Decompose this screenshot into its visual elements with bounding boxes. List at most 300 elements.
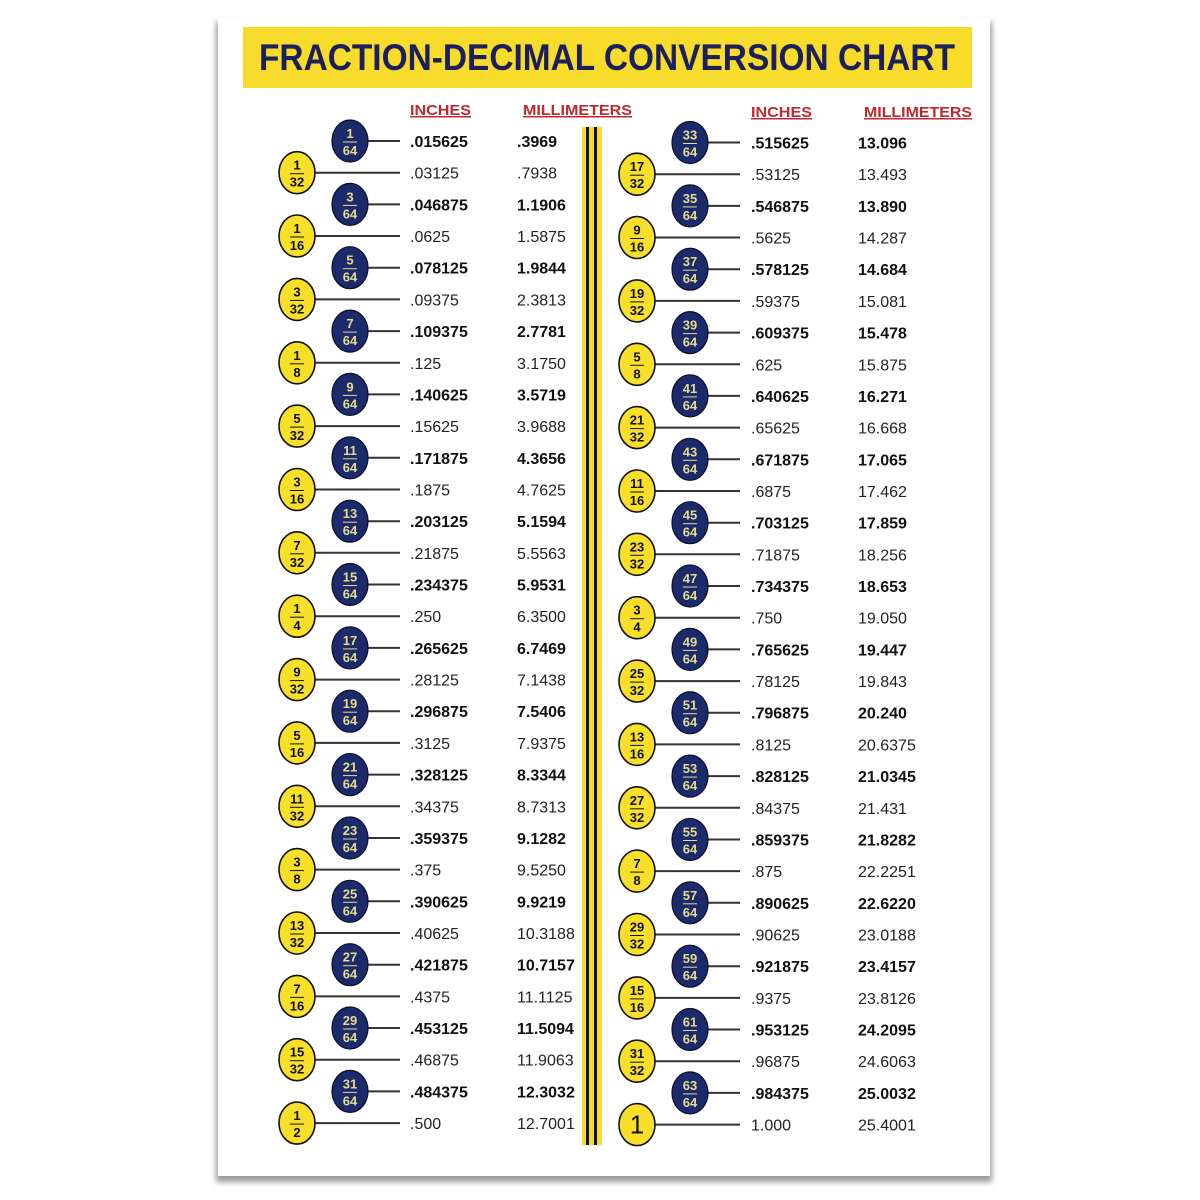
row 23/64: 23 [343, 823, 357, 838]
row 13/64: 5.1594 [517, 514, 566, 531]
row 3/64: .046875 [410, 197, 468, 214]
row 45/64 [672, 502, 907, 544]
row 1/64: .015625 [410, 134, 468, 151]
row 7/64 [332, 310, 566, 352]
row 9/64: 9 [346, 379, 354, 394]
row 43/64: 17.065 [858, 452, 907, 469]
row 53/64: 21.0345 [858, 769, 916, 786]
row 15/16: 23.8126 [858, 991, 916, 1008]
row 1/32 [279, 152, 557, 194]
row 25/64: .390625 [410, 894, 468, 911]
row 1/64: 1 [346, 126, 354, 141]
row 23/32 [619, 533, 907, 575]
row 3/16: 3 [293, 474, 301, 490]
row 19/64: 64 [343, 713, 358, 728]
column headers [410, 102, 972, 121]
row 57/64 [672, 882, 916, 924]
row 1/16 [279, 215, 566, 257]
row 1/16: 1 [293, 221, 301, 236]
title bar: FRACTION-DECIMAL CONVERSION CHART [259, 37, 955, 78]
row 1/32: 32 [290, 175, 304, 190]
row 3/32: 3 [293, 284, 301, 299]
row 29/64: 29 [343, 1013, 357, 1028]
row 3/64: 3 [346, 189, 354, 204]
row 5/8: 8 [633, 366, 641, 381]
row 57/64: 64 [683, 905, 698, 920]
row 1/32: .7938 [517, 166, 557, 183]
row 21/64: 21 [343, 760, 357, 775]
row 17/32: 17 [630, 159, 644, 174]
row 23/32: 18.256 [858, 547, 907, 564]
row 47/64: 47 [683, 571, 697, 586]
row 53/64: 64 [683, 778, 698, 793]
row 11/16: 16 [630, 493, 644, 508]
row 29/32: 29 [630, 920, 644, 934]
row 17/64: 64 [343, 650, 358, 665]
row 21/64: 8.3344 [517, 768, 566, 785]
row 35/64 [672, 185, 907, 227]
row 45/64: .703125 [751, 516, 809, 533]
row 13/16: .8125 [751, 737, 791, 754]
row 7/64: 7 [346, 316, 354, 331]
row 3/8: 8 [293, 872, 301, 887]
row 11/64: 11 [343, 443, 357, 458]
row 31/32: 32 [630, 1063, 644, 1078]
row 51/64: .796875 [751, 706, 809, 723]
row 11/64 [332, 437, 566, 479]
row 55/64: 64 [683, 842, 698, 856]
row 59/64 [672, 945, 916, 987]
row 61/64: 24.2095 [858, 1022, 916, 1040]
row 9/64: 3.5719 [517, 387, 566, 404]
row 23/64 [332, 817, 566, 859]
row 5/32: 3.9688 [517, 419, 566, 436]
row 17/64 [332, 627, 566, 669]
row 5/8: .625 [751, 357, 782, 374]
row 43/64 [672, 438, 907, 480]
row 37/64: 64 [683, 271, 698, 286]
row 55/64: .859375 [751, 832, 809, 850]
center divider [582, 127, 602, 1145]
row 49/64: .765625 [751, 642, 809, 659]
row 3/32: 2.3813 [517, 292, 566, 309]
row 17/32: .53125 [751, 167, 800, 184]
row 33/64 [672, 122, 907, 164]
row 13/32 [279, 912, 575, 954]
row 49/64: 64 [683, 651, 698, 666]
row 19/32: 15.081 [858, 294, 907, 311]
row 1/4: .250 [410, 609, 441, 626]
row 29/64: .453125 [410, 1021, 468, 1038]
row 11/32 [279, 785, 566, 827]
row 7/16: 16 [290, 998, 304, 1013]
row 47/64 [672, 565, 907, 607]
row 29/64: 11.5094 [517, 1021, 574, 1038]
row 53/64 [672, 755, 916, 797]
row 43/64: .671875 [751, 452, 809, 469]
row 21/64 [332, 754, 566, 796]
row 25/64: 64 [343, 903, 358, 918]
row 27/64 [332, 944, 575, 986]
row 21/32: .65625 [751, 421, 800, 438]
row 51/64: 64 [683, 715, 698, 730]
row 39/64: 39 [683, 318, 697, 333]
row 11/32: .34375 [410, 799, 459, 816]
row 19/64: 19 [343, 696, 357, 711]
row 43/64: 43 [683, 444, 697, 459]
row 49/64: 19.447 [858, 642, 907, 659]
row 27/64: 10.7157 [517, 958, 575, 975]
row 9/32: 32 [290, 682, 304, 697]
row 21/64: 64 [343, 777, 358, 792]
row 7/8: .875 [751, 864, 782, 881]
row 5/32 [279, 405, 566, 447]
row 1/16: 1.5875 [517, 229, 566, 246]
row 27/32: 27 [630, 793, 644, 808]
row 43/64: 64 [683, 461, 698, 476]
row 21/32: 21 [630, 413, 644, 428]
row 31/64 [332, 1070, 575, 1112]
row 41/64: .640625 [751, 389, 809, 406]
row 25/32: 32 [630, 683, 644, 698]
row 7/8: 22.2251 [858, 864, 916, 881]
row 19/32: 19 [630, 286, 644, 301]
row 3/4: 19.050 [858, 611, 907, 628]
row 1/2 [279, 1102, 575, 1144]
row 13/32: 32 [290, 935, 304, 950]
row 11/32: 32 [290, 808, 304, 823]
row 5/64: 5 [346, 253, 354, 268]
row 7/32: 7 [293, 538, 301, 553]
column headers: INCHES [751, 104, 812, 121]
row 3/4 [619, 597, 907, 639]
row 5/32: .15625 [410, 419, 459, 436]
row 7/16: .4375 [410, 989, 450, 1006]
row 47/64: 64 [683, 588, 698, 603]
row 59/64: 23.4157 [858, 959, 916, 976]
row 1/4: 6.3500 [517, 609, 566, 626]
row 19/32: .59375 [751, 294, 800, 311]
row 41/64: 16.271 [858, 389, 907, 406]
row 1: 1 [630, 1110, 644, 1140]
row 13/64: .203125 [410, 514, 468, 531]
row 5/8: 5 [633, 349, 641, 364]
row 1/64: .3969 [517, 134, 557, 151]
row 27/32: 32 [630, 810, 644, 825]
row 39/64: 15.478 [858, 326, 907, 343]
row 3/16: 4.7625 [517, 482, 566, 500]
row 15/32: 11.9063 [517, 1053, 574, 1070]
row 3/8: .375 [410, 863, 441, 880]
row 13/32: 10.3188 [517, 926, 575, 943]
row 5/8 [619, 343, 907, 385]
row 31/32: .96875 [751, 1054, 800, 1071]
row 5/64: 1.9844 [517, 261, 566, 278]
row 1: 25.4001 [858, 1118, 916, 1135]
row 15/32: 32 [290, 1062, 304, 1077]
row 25/32: .78125 [751, 674, 800, 691]
row 21/32 [619, 407, 907, 449]
row 1/2: 1 [293, 1108, 301, 1123]
row 1: 1.000 [751, 1118, 791, 1135]
row 7/64: 64 [343, 333, 358, 348]
row 7/16 [279, 975, 573, 1017]
row 55/64: 55 [683, 824, 697, 840]
row 41/64: 64 [683, 398, 698, 413]
row 11/32: 8.7313 [517, 799, 566, 816]
row 25/64: 25 [343, 886, 357, 901]
row 3/8: 9.5250 [517, 863, 566, 880]
row 31/32: 31 [630, 1046, 644, 1061]
row 9/16 [619, 216, 907, 258]
row 45/64: 64 [683, 525, 698, 540]
row 9/16: 14.287 [858, 230, 907, 248]
row 9/16: 9 [633, 222, 641, 238]
row 7/64: .109375 [410, 324, 468, 341]
row 1/8: 8 [293, 365, 301, 380]
row 3/32: 32 [290, 301, 304, 316]
row 59/64: .921875 [751, 959, 809, 976]
row 63/64: 63 [683, 1078, 697, 1093]
row 37/64 [672, 248, 907, 290]
row 35/64: 35 [683, 191, 697, 206]
row 59/64: 64 [683, 968, 698, 983]
row 9/32: 7.1438 [517, 673, 566, 690]
row 3/64 [332, 183, 566, 225]
row 11/64: .171875 [410, 451, 468, 468]
row 53/64: .828125 [751, 769, 809, 786]
row 51/64: 51 [683, 698, 697, 713]
row 9/64: 64 [343, 396, 358, 411]
row 9/32: 9 [293, 665, 301, 680]
row 9/32: .28125 [410, 673, 459, 690]
row 47/64: 18.653 [858, 579, 907, 596]
row 45/64: 45 [683, 508, 697, 523]
row 13/64: 64 [343, 523, 358, 538]
row 5/16: 5 [293, 728, 301, 743]
row 27/64: 27 [343, 950, 357, 965]
row 3/4: .750 [751, 611, 782, 628]
row 3/8: 3 [293, 855, 301, 870]
row 53/64: 53 [683, 761, 697, 776]
row 15/64: .234375 [410, 578, 468, 594]
row 27/32: 21.431 [858, 801, 907, 818]
row 33/64: .515625 [751, 136, 809, 152]
poster background [218, 18, 990, 1176]
row 15/16 [619, 977, 916, 1019]
row 13/32: .40625 [410, 926, 459, 943]
column headers: INCHES [410, 102, 471, 119]
row 33/64: 13.096 [858, 136, 907, 152]
column headers: MILLIMETERS [523, 102, 632, 119]
row 5/32: 5 [293, 411, 301, 426]
row 51/64 [672, 692, 907, 734]
row 15/64: 64 [343, 586, 358, 602]
row 57/64: .890625 [751, 896, 809, 913]
row 37/64: 37 [683, 254, 697, 269]
row 61/64 [672, 1008, 916, 1050]
row 57/64: 57 [683, 888, 697, 903]
row 31/64: 31 [343, 1076, 357, 1091]
row 9/16: 16 [630, 240, 644, 254]
row 1/64: 64 [343, 143, 358, 158]
row 17/32: 32 [630, 176, 644, 191]
row 3/4: 3 [633, 603, 641, 618]
row 23/64: 64 [343, 840, 358, 855]
row 3/32 [279, 278, 566, 320]
row 37/64: 14.684 [858, 262, 907, 279]
row 7/8: 7 [633, 856, 641, 871]
row 19/64 [332, 690, 566, 732]
row 3/32: .09375 [410, 292, 459, 309]
row 31/64: 12.3032 [517, 1084, 575, 1101]
row 13/64 [332, 500, 566, 542]
row 33/64: 64 [683, 144, 698, 160]
row 11/16: .6875 [751, 484, 791, 501]
row 11/64: 64 [343, 460, 358, 475]
row 63/64: 25.0032 [858, 1086, 916, 1103]
row 5/32: 32 [290, 428, 304, 443]
row 45/64: 17.859 [858, 516, 907, 533]
row 23/64: 9.1282 [517, 831, 566, 848]
row 39/64: 64 [683, 335, 698, 350]
row 11/16 [619, 470, 907, 512]
row 5/16: 16 [290, 745, 304, 760]
row 5/64: .078125 [410, 261, 468, 278]
title bar [243, 27, 972, 88]
row 1/2: .500 [410, 1116, 441, 1133]
row 1/16: .0625 [410, 229, 450, 246]
row 1/8: .125 [410, 356, 441, 373]
row 15/16: .9375 [751, 991, 791, 1008]
row 7/64: 2.7781 [517, 324, 566, 341]
row 23/64: .359375 [410, 831, 468, 848]
row 17/32: 13.493 [858, 167, 907, 184]
row 17/32 [619, 153, 907, 195]
row 15/16: 16 [630, 1000, 644, 1015]
row 37/64: .578125 [751, 262, 809, 279]
row 9/32 [279, 659, 566, 701]
row 15/64: 5.9531 [517, 578, 566, 594]
row 31/64: .484375 [410, 1084, 468, 1101]
row 41/64 [672, 375, 907, 417]
row 5/64 [332, 247, 566, 289]
row 27/32 [619, 787, 907, 829]
row 25/32 [619, 660, 907, 702]
row 23/32: 23 [630, 539, 644, 554]
row 11/64: 4.3656 [517, 451, 566, 468]
row 17/64: 6.7469 [517, 641, 566, 658]
row 19/32: 32 [630, 303, 644, 318]
row 49/64: 49 [683, 634, 697, 649]
row 57/64: 22.6220 [858, 896, 916, 913]
row 25/32: 19.843 [858, 674, 907, 691]
row 3/16: .1875 [410, 482, 450, 500]
row 5/16: 7.9375 [517, 736, 566, 753]
right column [619, 122, 916, 1146]
row 15/32 [279, 1039, 574, 1081]
column headers: MILLIMETERS [864, 104, 972, 121]
row 63/64: 64 [683, 1095, 698, 1110]
row 13/16 [619, 723, 916, 765]
row 5/8: 15.875 [858, 357, 907, 374]
row 3/16: 16 [290, 492, 304, 506]
row 29/32: 23.0188 [858, 928, 916, 944]
row 59/64: 59 [683, 951, 697, 966]
row 13/16: 20.6375 [858, 737, 916, 754]
row 1/4: 4 [293, 618, 301, 633]
row 31/64: 64 [343, 1093, 358, 1108]
row 51/64: 20.240 [858, 706, 907, 723]
row 27/64: .421875 [410, 958, 468, 975]
row 11/16: 17.462 [858, 484, 907, 501]
row 39/64 [672, 312, 907, 354]
row 13/64: 13 [343, 506, 357, 521]
row 25/32: 25 [630, 666, 644, 681]
row 1/2: 2 [293, 1125, 301, 1140]
row 55/64 [672, 818, 916, 860]
row 9/16: .5625 [751, 230, 791, 248]
row 31/32 [619, 1040, 916, 1082]
row 3/16 [279, 468, 566, 510]
row 3/8 [279, 849, 566, 891]
row 13/16: 13 [630, 729, 644, 744]
row 3/64: 1.1906 [517, 197, 566, 214]
row 55/64: 21.8282 [858, 832, 916, 850]
row 7/8: 8 [633, 873, 641, 888]
row 7/32: .21875 [410, 546, 459, 563]
row 23/32: 32 [630, 556, 644, 571]
row 7/16: 7 [293, 981, 301, 996]
row 7/32: 32 [290, 555, 304, 570]
row 35/64: 64 [683, 208, 698, 223]
row 7/8 [619, 850, 916, 892]
row 21/32: 16.668 [858, 421, 907, 438]
row 61/64: 64 [683, 1032, 698, 1046]
row 15/64: 15 [343, 570, 357, 584]
row 29/32: 32 [630, 936, 644, 952]
row 19/32 [619, 280, 907, 322]
row 49/64 [672, 628, 907, 670]
row 11/16: 11 [630, 476, 644, 491]
row 41/64: 41 [683, 381, 697, 396]
row 15/32: 15 [290, 1045, 304, 1060]
row 63/64 [672, 1072, 916, 1114]
row 17/64: 17 [343, 633, 357, 648]
row 5/16 [279, 722, 566, 764]
row 25/64 [332, 880, 566, 922]
row 35/64: 13.890 [858, 199, 907, 216]
row 1/64 [332, 120, 557, 162]
row 21/64: .328125 [410, 768, 468, 785]
row 35/64: .546875 [751, 199, 809, 216]
row 27/32: .84375 [751, 801, 800, 818]
row 3/64: 64 [343, 206, 358, 221]
row 31/32: 24.6063 [858, 1054, 916, 1071]
row 23/32: .71875 [751, 547, 800, 564]
row 15/64 [332, 564, 566, 606]
row 1/32: .03125 [410, 166, 459, 183]
row 5/64: 64 [343, 270, 358, 285]
row 1/4 [279, 595, 566, 637]
row 21/32: 32 [630, 430, 644, 445]
row 1/32: 1 [293, 158, 301, 173]
row 1/8 [279, 342, 566, 384]
row 1 [619, 1104, 916, 1146]
row 17/64: .265625 [410, 641, 468, 658]
row 7/16: 11.1125 [517, 989, 573, 1006]
row 27/64: 64 [343, 967, 358, 982]
